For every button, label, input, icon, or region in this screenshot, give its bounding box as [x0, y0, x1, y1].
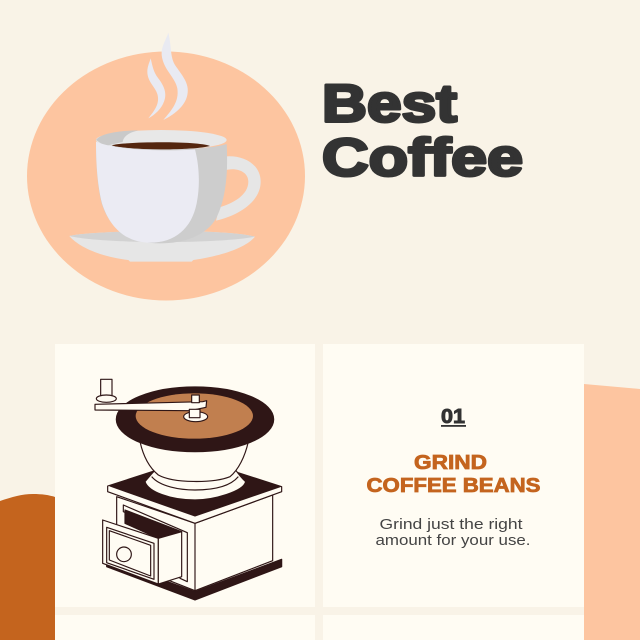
steam	[147, 33, 188, 120]
hopper coffee	[136, 393, 253, 439]
panel: illustration card	[55, 344, 315, 607]
title: Best	[322, 74, 457, 134]
saucer	[69, 231, 255, 262]
step heading: GRIND	[414, 452, 487, 474]
cup body shadow side	[96, 142, 227, 243]
background shape: orange left	[0, 494, 55, 640]
step heading: COFFEE BEANS	[366, 475, 540, 497]
icon: coffee grinder	[95, 379, 282, 600]
step number: 01	[441, 406, 465, 428]
step description	[376, 517, 530, 549]
panel: lower left card	[55, 615, 315, 640]
cup rim	[96, 130, 227, 150]
drawer opening	[123, 505, 187, 582]
hopper rim	[116, 387, 274, 452]
grinder base plinth	[107, 559, 282, 600]
bowl foot	[145, 467, 246, 500]
background shape: peach right	[584, 384, 640, 640]
coffee surface	[112, 142, 210, 149]
step heading	[366, 452, 540, 497]
grinder box top	[108, 458, 282, 523]
handle	[216, 156, 261, 221]
title	[322, 74, 523, 188]
step description: amount for your use.	[376, 533, 530, 549]
bowl	[140, 442, 248, 481]
step description: Grind just the right	[380, 517, 522, 533]
peach circle behind cup	[27, 52, 305, 300]
grinder box	[117, 495, 273, 591]
drawer	[103, 520, 182, 584]
title: Coffee	[322, 128, 523, 188]
icon: coffee cup with steam	[69, 33, 261, 262]
panel: text card	[323, 344, 584, 607]
crank handle	[95, 379, 208, 422]
panel: lower right card	[323, 615, 584, 640]
cup body light side	[96, 142, 199, 243]
